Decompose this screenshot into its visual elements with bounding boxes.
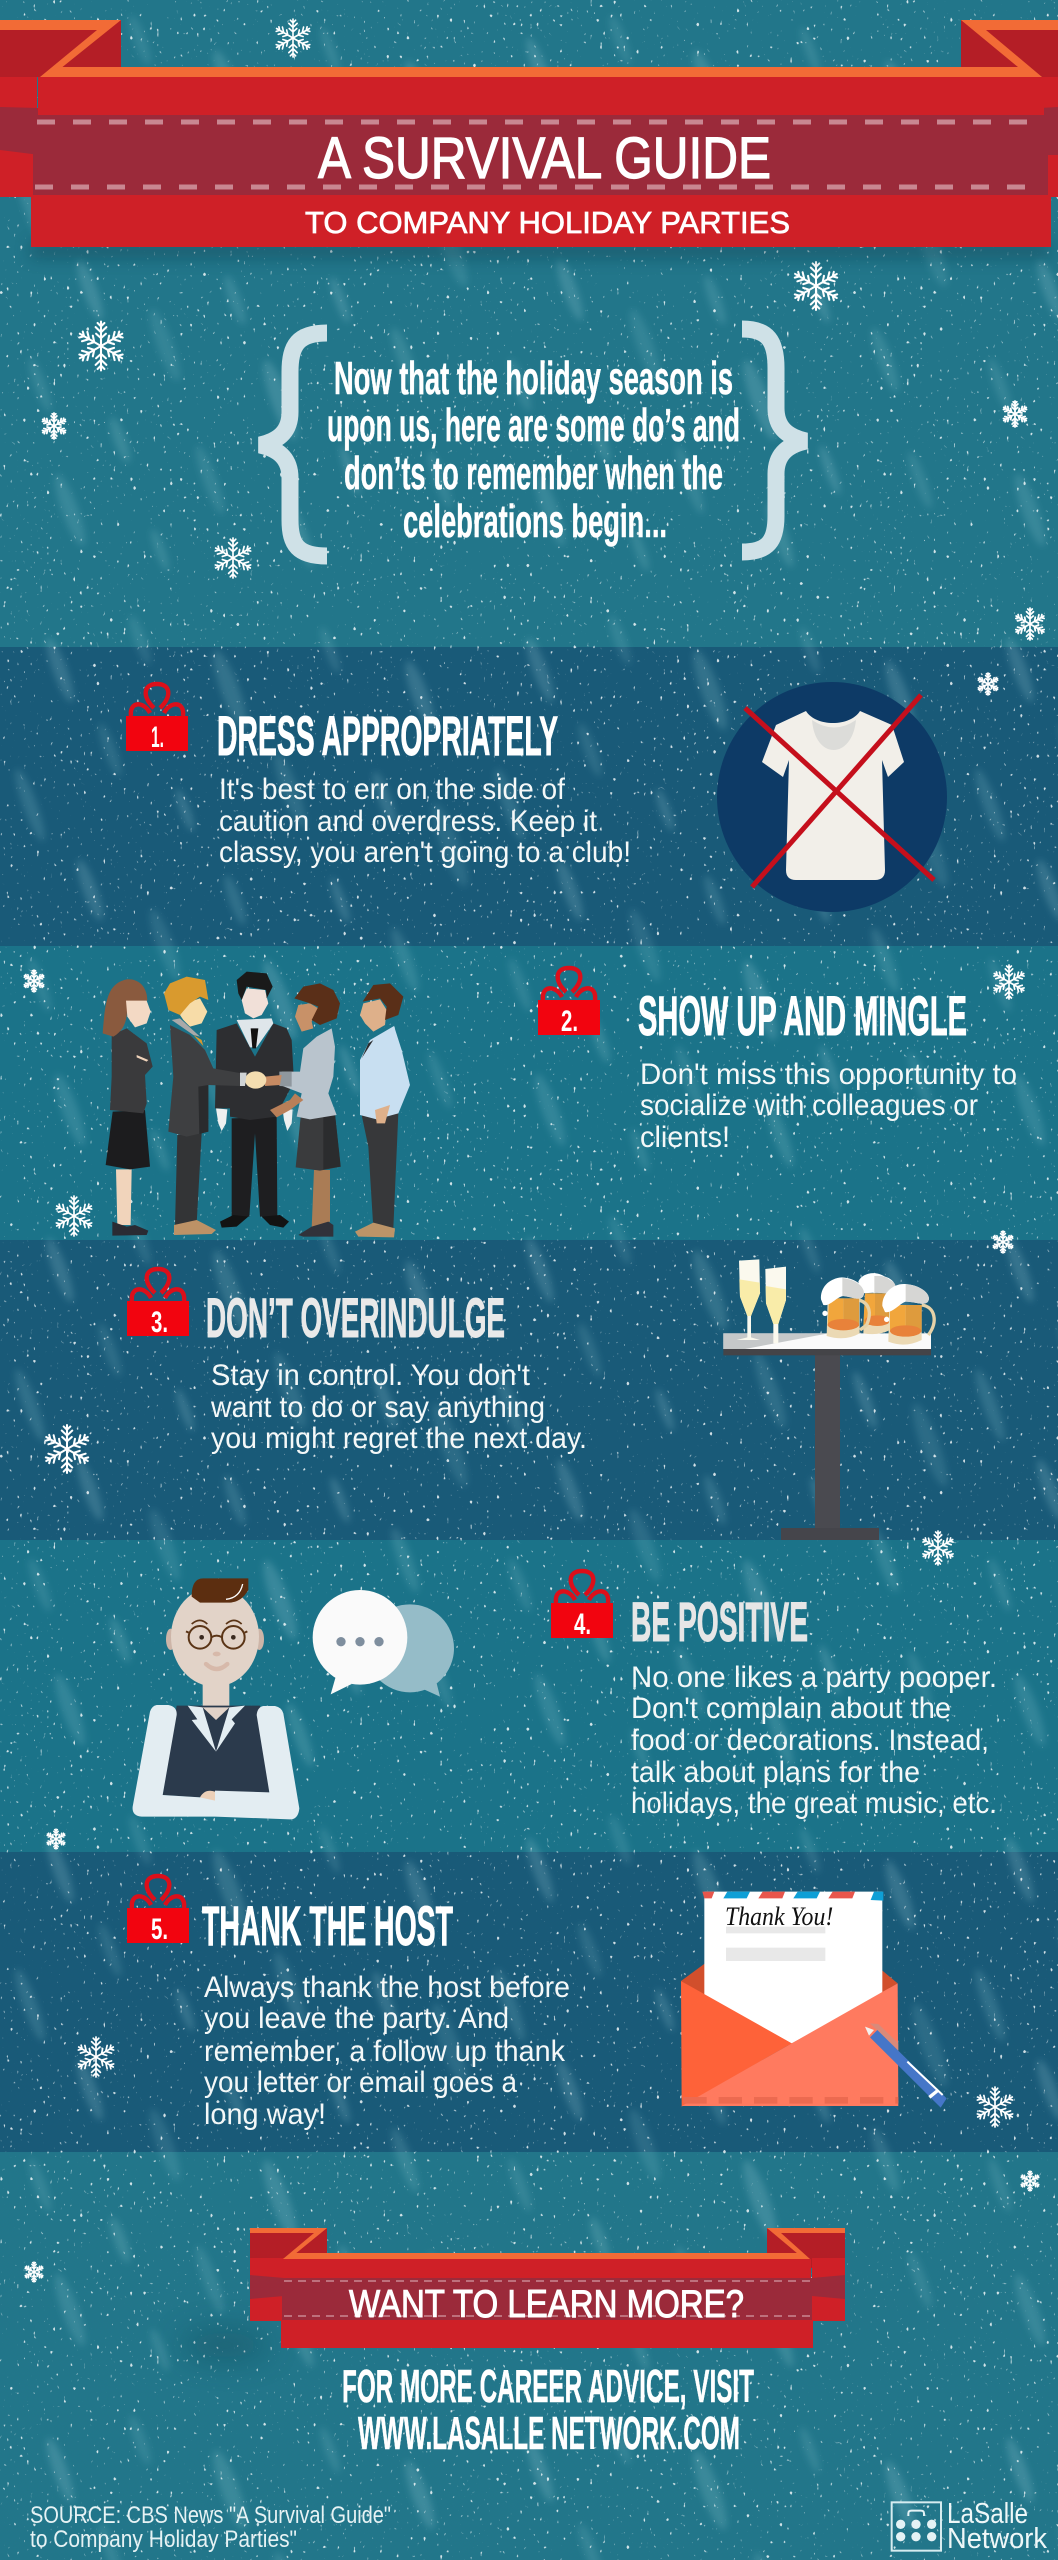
- body 3: want to do or say anything: [210, 1391, 545, 1424]
- panel: don't overindulge: DON’T OVERINDULGE: [206, 1286, 505, 1349]
- subtitle: TO COMPANY HOLIDAY PARTIES: [305, 205, 790, 240]
- icon: gift number 2: 2.: [561, 1005, 578, 1038]
- call to action banner: [180, 2228, 845, 2359]
- panel: show up and mingle: [0, 946, 1058, 1240]
- body 4: Don't complain about the: [631, 1692, 951, 1725]
- body 1: classy, you aren't going to a club!: [219, 836, 631, 869]
- body 5: you leave the party. And: [204, 2002, 509, 2035]
- logo mark: [892, 2502, 941, 2551]
- icon: gift number 5: 5.: [151, 1913, 168, 1946]
- icon: beer mugs: [821, 1273, 934, 1345]
- icon: handshake: [240, 1071, 266, 1089]
- icon: gift number 1: [126, 684, 188, 754]
- heading 5: THANK THE HOST: [202, 1894, 453, 1957]
- heading 4: BE POSITIVE: [631, 1590, 808, 1653]
- intro quote: [260, 329, 806, 556]
- person: woman in grey blouse: [265, 983, 341, 1237]
- body 3: [210, 1359, 587, 1455]
- body 4: No one likes a party pooper.: [631, 1661, 997, 1694]
- body 2: clients!: [640, 1121, 730, 1154]
- body 1: [219, 773, 631, 869]
- banner heading: WANT TO LEARN MORE?: [349, 2283, 744, 2326]
- career advice text: [342, 2360, 754, 2459]
- person: blond man: [164, 977, 242, 1235]
- body 5: Always thank the host before: [204, 1971, 570, 2004]
- body 1: caution and overdress. Keep it: [219, 805, 598, 838]
- source note: [30, 2502, 391, 2553]
- icon: gift number 5: [127, 1876, 189, 1946]
- icon: champagne flutes: [737, 1259, 786, 1343]
- icon: speech bubbles: [313, 1590, 454, 1697]
- icon: blue pen: [865, 2023, 947, 2108]
- body 2: socialize with colleagues or: [640, 1089, 978, 1122]
- logo: LaSalle Network: [892, 2498, 1047, 2555]
- person: man in blue shirt: [355, 983, 410, 1237]
- intro text: don’ts to remember when the: [344, 447, 723, 499]
- title: A SURVIVAL GUIDE: [318, 126, 771, 191]
- panel: dress appropriately: [0, 647, 1058, 946]
- body 3: you might regret the next day.: [211, 1422, 587, 1455]
- body 5: remember, a follow up thank: [204, 2035, 566, 2068]
- body 4: [631, 1661, 997, 1820]
- icon: round glasses: [186, 1620, 247, 1649]
- icon: gift number 3: 3.: [151, 1306, 168, 1339]
- source note: to Company Holiday Parties": [30, 2526, 297, 2553]
- body 4: food or decorations. Instead,: [631, 1724, 989, 1757]
- logo text: Network: [947, 2523, 1047, 2555]
- body 4: talk about plans for the: [631, 1756, 920, 1789]
- icon: gift number 4: [551, 1571, 613, 1641]
- person: man in black suit: [215, 972, 294, 1228]
- body 4: holidays, the great music, etc.: [631, 1787, 997, 1820]
- icon: gift number 1: 1.: [151, 721, 164, 754]
- body 5: [204, 1971, 570, 2131]
- body 5: long way!: [204, 2098, 326, 2131]
- person: woman with crossed arms: [103, 979, 153, 1236]
- body 2: Don't miss this opportunity to: [640, 1058, 1017, 1091]
- panel: thank the host: [0, 1852, 1058, 2152]
- icon: gift number 4: 4.: [574, 1608, 591, 1641]
- heading 1: DRESS APPROPRIATELY: [217, 704, 558, 767]
- illustration: five colleagues shaking hands: [103, 972, 410, 1237]
- icon: gift number 3: [127, 1269, 189, 1339]
- body 3: Stay in control. You don't: [211, 1359, 531, 1392]
- body 1: It's best to err on the side of: [219, 773, 566, 806]
- illustration: thank you letter in envelope with pen: [681, 1892, 947, 2108]
- logo text: LaSalle: [947, 2498, 1028, 2530]
- panel: don't overindulge: [0, 1240, 1058, 1540]
- right brace: [742, 329, 806, 552]
- icon: crossed out t-shirt: [717, 682, 947, 912]
- body 2: [640, 1058, 1017, 1154]
- icon: gift number 2: [538, 968, 600, 1038]
- body 5: you letter or email goes a: [204, 2066, 517, 2099]
- illustration: high table with drinks: [723, 1259, 934, 1540]
- intro text: Now that the holiday season is: [334, 352, 733, 404]
- left brace: [260, 333, 327, 556]
- panel: be positive: [0, 1540, 1058, 1852]
- source note: SOURCE: CBS News "A Survival Guide": [30, 2502, 391, 2529]
- intro text: upon us, here are some do’s and: [327, 399, 740, 451]
- intro text: [327, 352, 740, 547]
- intro text: celebrations begin...: [403, 495, 667, 547]
- logo text: [947, 2498, 1047, 2555]
- letter text: Thank You!: [725, 1902, 833, 1931]
- illustration: smiling man with glasses and speech bubbles: [133, 1578, 454, 1819]
- top ribbon banner: [0, 20, 1058, 258]
